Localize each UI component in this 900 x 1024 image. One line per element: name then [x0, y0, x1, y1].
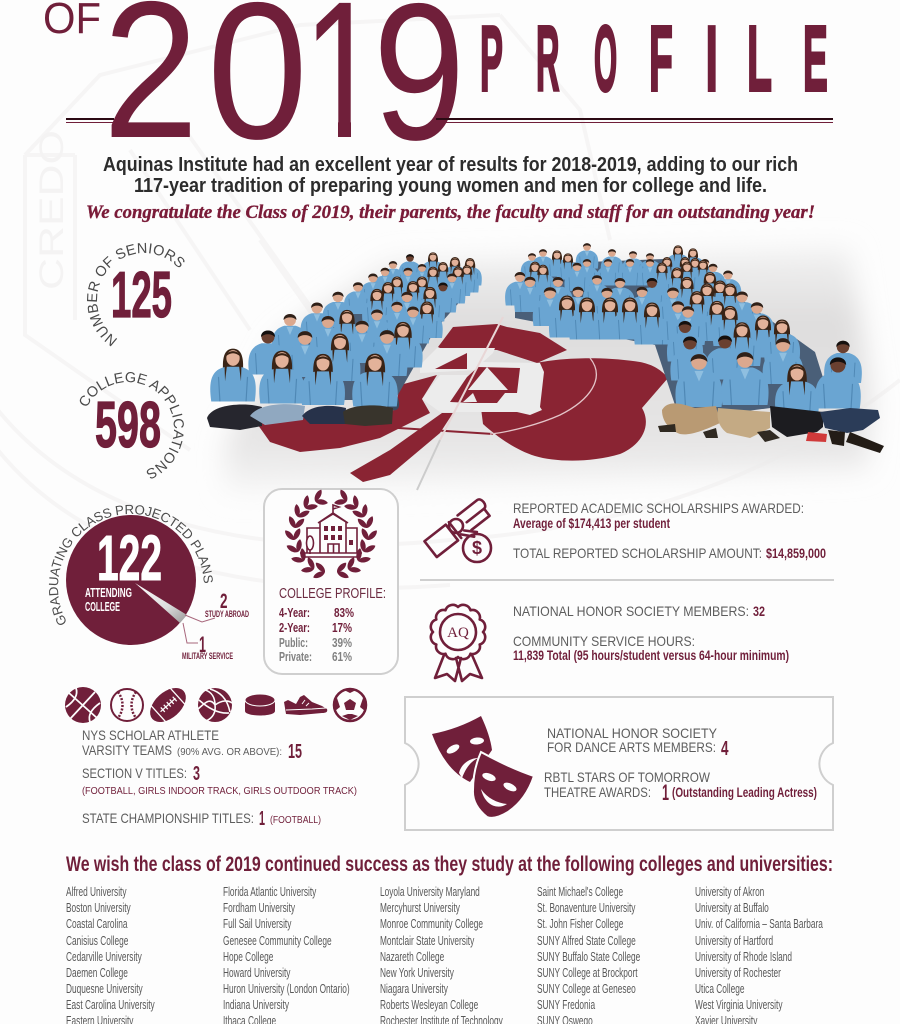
icon: theatre masks	[432, 716, 534, 818]
crowd backing	[282, 258, 830, 420]
college profile heading: COLLEGE PROFILE:	[279, 585, 386, 602]
athletics text: (90% AVG. OR ABOVE):	[177, 746, 282, 758]
college profile rows	[279, 605, 354, 664]
college list: column 4: SUNY Buffalo State College	[537, 950, 640, 965]
PROFILE: I	[706, 8, 718, 111]
intro text: Aquinas Institute had an excellent year of results for 2018-2019, adding to our rich	[103, 154, 798, 176]
PROFILE: E	[803, 8, 828, 112]
stat: college applications: COLLEGE APPLICATIONS	[80, 372, 184, 478]
honor society and service text: 32	[753, 604, 765, 619]
college list: column 5: University of Hartford	[695, 934, 773, 949]
icon: volleyball	[198, 688, 232, 722]
icon: laurel with college building	[283, 488, 379, 580]
icon: AQ award rosette	[431, 605, 485, 681]
college list: column 3: Monroe Community College	[380, 917, 483, 932]
college profile rows: 4-Year:	[279, 605, 310, 620]
college list: column 1	[66, 885, 155, 1024]
pie: graduating class projected plans: ATTENDING	[85, 585, 132, 600]
maroon circle	[66, 515, 196, 645]
gym floor	[225, 248, 872, 492]
college list: column 5: University at Buffalo	[695, 901, 769, 916]
icon: hockey puck	[245, 694, 275, 716]
college list: column 5: University of Akron	[695, 885, 764, 900]
theatre awards text: 1	[662, 780, 669, 805]
athletics text: (FOOTBALL)	[270, 814, 321, 826]
PROFILE: F	[649, 7, 673, 111]
college list: column 4: St. Bonaventure University	[537, 901, 636, 916]
college list: column 1: Alfred University	[66, 885, 127, 900]
scholarship text	[513, 500, 826, 561]
college list: column 5: University of Rhode Island	[695, 950, 792, 965]
congratulation line: We congratulate the Class of 2019, their parents, the faculty and staff for an outstanding year!	[86, 203, 815, 223]
scholarship text: Average of $174,413 per student	[513, 516, 670, 531]
college list: column 1: Boston University	[66, 901, 131, 916]
honor society and service text: COMMUNITY SERVICE HOURS:	[513, 633, 695, 649]
theatre awards text	[544, 769, 817, 805]
college list: column 4: SUNY Fredonia	[537, 998, 596, 1013]
arc heading: GRADUATING CLASS PROJECTED PLANS	[48, 504, 213, 625]
college list: column 1: Canisius College	[66, 934, 128, 949]
athletics text: STATE CHAMPIONSHIP TITLES:	[82, 810, 254, 826]
theatre awards text: THEATRE AWARDS:	[544, 784, 651, 800]
athletics text: (FOOTBALL, GIRLS INDOOR TRACK, GIRLS OUTDOOR TRACK)	[82, 785, 357, 797]
college list: column 2: Indiana University	[223, 998, 290, 1013]
pie: graduating class projected plans	[48, 504, 249, 661]
military service: 1	[199, 632, 206, 657]
athletics text: NYS SCHOLAR ATHLETE	[82, 727, 219, 743]
icon: football	[144, 681, 192, 729]
college list: column 4: St. John Fisher College	[537, 917, 623, 932]
stat: college applications: 598	[95, 388, 161, 461]
leader lines	[183, 615, 215, 643]
scholarship text: $14,859,000	[766, 546, 826, 561]
icon: running shoe	[284, 695, 327, 715]
court logo	[258, 317, 668, 490]
scholarship text: REPORTED ACADEMIC SCHOLARSHIPS AWARDED:	[513, 500, 804, 516]
college list: column 4: Saint Michael's College	[537, 885, 623, 900]
honor society and service text	[513, 603, 789, 663]
PROFILE	[480, 6, 828, 112]
study abroad: 2	[220, 590, 228, 613]
college list: column 4: SUNY College at Geneseo	[537, 982, 636, 997]
college profile rows: 83%	[334, 605, 354, 620]
dance arts text: NATIONAL HONOR SOCIETY	[547, 725, 718, 741]
college profile rows: 17%	[332, 620, 352, 635]
intro text: 117-year tradition of preparing young women and men for college and life.	[134, 175, 767, 197]
college list: column 3: Nazareth College	[380, 950, 444, 965]
athletics text	[82, 727, 357, 830]
students: left wing	[207, 252, 482, 430]
watermark crest	[0, 15, 900, 588]
PROFILE: O	[594, 6, 617, 111]
college list: column 3	[380, 885, 503, 1024]
pie: graduating class projected plans: COLLEGE	[85, 599, 120, 614]
athletics text: SECTION V TITLES:	[82, 765, 187, 781]
college list: column 3: Roberts Wesleyan College	[380, 998, 478, 1013]
college profile rows: 2-Year:	[279, 620, 310, 635]
college list: column 1: Daemen College	[66, 966, 128, 981]
icons: sports	[65, 681, 366, 729]
college list: column 4	[537, 885, 640, 1024]
PROFILE: R	[536, 6, 560, 111]
2019	[103, 0, 465, 181]
college profile rows: 61%	[332, 649, 352, 664]
PROFILE: P	[480, 7, 503, 110]
title: Class of 2019 Profile	[43, 0, 828, 181]
students: right wing	[505, 243, 884, 453]
college list: column 1: Cedarville University	[66, 950, 142, 965]
athletics text: 15	[288, 741, 302, 763]
icon: baseball	[111, 689, 143, 721]
panel: college profile	[264, 488, 398, 674]
college list: column 3: New York University	[380, 966, 454, 981]
dance arts text: 4	[721, 738, 729, 760]
icon: soccer ball	[334, 688, 366, 721]
scholarship text: TOTAL REPORTED SCHOLARSHIP AMOUNT:	[513, 545, 762, 561]
college list: column 2: Full Sail University	[223, 917, 292, 932]
college list: column 3: Montclair State University	[380, 934, 475, 949]
122 attending college: 122	[97, 522, 162, 594]
college list: column 2	[223, 885, 350, 1024]
dance arts text: FOR DANCE ARTS MEMBERS:	[547, 739, 716, 755]
honor society and service text: NATIONAL HONOR SOCIETY MEMBERS:	[513, 603, 749, 619]
athletics text: VARSITY TEAMS	[82, 742, 172, 758]
college list: column 5: West Virginia University	[695, 998, 783, 1013]
theatre awards text: RBTL STARS OF TOMORROW	[544, 769, 711, 785]
dance arts text	[547, 725, 729, 760]
college list: column 2: Fordham University	[223, 901, 295, 916]
college list: column 2: Howard University	[223, 966, 291, 981]
athletics text: 1	[259, 808, 265, 830]
title rules	[66, 118, 833, 123]
theatre awards text: (Outstanding Leading Actress)	[672, 785, 817, 800]
college list: column 5: University of Rochester	[695, 966, 781, 981]
watermark crest: CREDO	[33, 130, 71, 290]
college list: column 5: Univ. of California – Santa Barbara	[695, 917, 824, 932]
wedge	[135, 583, 187, 623]
college list: column 3: Niagara University	[380, 982, 448, 997]
icon: AQ award rosette: AQ	[447, 625, 469, 641]
college list: column 2: Genesee Community College	[223, 934, 332, 949]
honor society and service text: 11,839 Total (95 hours/student versus 64-hour minimum)	[513, 648, 789, 663]
college list: column 3: Loyola University Maryland	[380, 885, 480, 900]
PROFILE: L	[747, 8, 772, 111]
athletics text: 3	[193, 763, 200, 785]
college list: column 4: SUNY College at Brockport	[537, 966, 638, 981]
college list: column 1: Duquesne University	[66, 982, 143, 997]
college list: column 3: Mercyhurst University	[380, 901, 460, 916]
icon: basketball	[65, 687, 101, 723]
intro text	[103, 154, 798, 197]
college list: column 1: East Carolina University	[66, 998, 155, 1013]
college list: column 5: Utica College	[695, 982, 744, 997]
college list: column 2: Florida Atlantic University	[223, 885, 317, 900]
pie: graduating class projected plans: MILITARY SERVICE	[182, 651, 233, 661]
panel: ticket	[405, 697, 833, 830]
college list: column 2: Huron University (London Ontario)	[223, 982, 350, 997]
college list: column 5	[695, 885, 824, 1024]
group photo of seniors on gym floor	[207, 243, 884, 492]
stat: number of seniors: 125	[111, 258, 172, 331]
college profile rows: Public:	[279, 635, 308, 650]
college profile rows: Private:	[279, 649, 312, 664]
icon: scroll and dollar coin: $	[472, 538, 482, 558]
icon: scroll and dollar coin	[424, 498, 497, 563]
college list: column 4: SUNY Alfred State College	[537, 934, 636, 949]
college list: column 2: Hope College	[223, 950, 273, 965]
college list: column 1: Coastal Carolina	[66, 917, 128, 932]
pie: graduating class projected plans: STUDY ABROAD	[205, 609, 249, 619]
students: seated front of right group	[549, 296, 585, 338]
front row legs	[375, 385, 399, 410]
college profile rows: 39%	[332, 635, 352, 650]
stat: number of seniors: NUMBER OF SENIORS	[87, 242, 184, 346]
